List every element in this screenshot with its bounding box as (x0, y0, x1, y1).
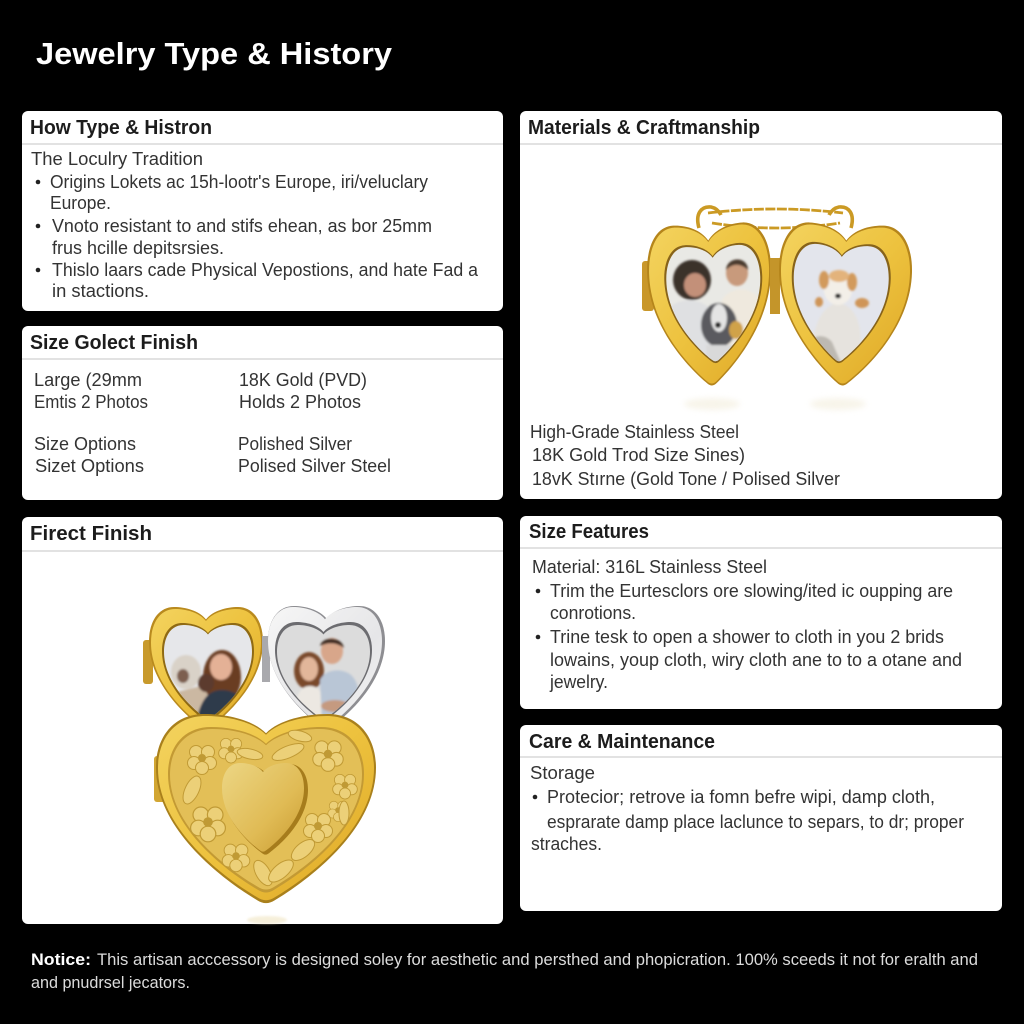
icon: chain (698, 207, 852, 228)
text block: finish options (238, 370, 391, 476)
text block: tradition list: Europe. (50, 193, 111, 213)
panel: how type and history (22, 111, 503, 311)
text block: finish options: Holds 2 Photos (239, 392, 361, 412)
text block: storage list: Storage (530, 763, 595, 783)
notice text: This artisan acccessory is designed soley for aesthetic and persthed and phopicration. 100% sceeds it not for eralth and (97, 950, 978, 969)
text block: size options: Sizet Options (35, 456, 144, 476)
text block: features list: Trim the Eurtesclors ore slowing/ited ic oupping are (550, 581, 953, 601)
text block: storage list (530, 763, 964, 854)
text block: size options: Large (29mm (34, 370, 142, 390)
text block: features list: Trine tesk to open a shower to cloth in you 2 brids (550, 627, 944, 647)
title: Jewelry Type & History (36, 36, 393, 71)
text block: finish options: Polised Silver Steel (238, 456, 391, 476)
heading: size select finish: Size Golect Finish (30, 332, 198, 354)
heading: how type and history: How Type & Histron (30, 117, 212, 139)
text block: material list: High-Grade Stainless Steel (530, 422, 739, 442)
text block: tradition list: in stactions. (52, 281, 149, 301)
text block: finish options: 18K Gold (PVD) (239, 370, 367, 390)
panel: size features (520, 516, 1002, 709)
heading: materials: Materials & Craftmanship (528, 117, 760, 139)
text block: features list: lowains, youp cloth, wiry cloth ane to to a otane and (550, 650, 962, 670)
text block: storage list: straches. (531, 834, 602, 854)
text block: tradition list: Vnoto resistant to and stifs ehean, as bor 25mm (52, 216, 432, 236)
text block: tradition list: frus hcille depitsrsies. (52, 238, 224, 258)
icon: open silver locket with photo (262, 606, 385, 716)
icon: left locket with family photo (642, 221, 774, 388)
reflection (684, 398, 740, 410)
text block: size options (34, 370, 148, 476)
text block: features list: Material: 316L Stainless Steel (532, 557, 767, 577)
heading: finish: Firect Finish (30, 523, 152, 545)
text block: finish options: Polished Silver (238, 434, 352, 454)
floral wreath (179, 728, 357, 889)
text block: tradition list: Origins Lokets ac 15h-lootr's Europe, iri/veluclary (50, 172, 428, 192)
panel: materials and craftsmanship (520, 111, 1002, 499)
text block: tradition list (31, 149, 479, 301)
text block: material list (530, 422, 840, 489)
illustration: three heart lockets (143, 606, 385, 924)
text block: tradition list: The Loculry Tradition (31, 149, 203, 169)
icon: right locket with puppy photo (770, 221, 913, 388)
center heart (223, 764, 308, 855)
text block: size options: Emtis 2 Photos (34, 392, 148, 412)
text block: tradition list: Thislo laars cade Physical Vepostions, and hate Fad a (52, 260, 479, 280)
icon: open gold locket with photo (143, 607, 263, 716)
heading: size features: Size Features (529, 521, 649, 543)
panel: size and finish (22, 326, 503, 500)
icon: closed floral gold locket (154, 714, 376, 903)
notice text: and pnudrsel jecators. (31, 973, 190, 992)
text block: storage list: esprarate damp place laclunce to separs, to dr; proper (547, 812, 964, 832)
panel: finish with lockets (22, 517, 503, 924)
text block: material list: 18vK Stırne (Gold Tone / Polised Silver (532, 469, 840, 489)
text block: material list: 18K Gold Trod Size Sines) (532, 445, 745, 465)
text block: storage list: Protecior; retrove ia fomn befre wipi, damp cloth, (547, 787, 935, 807)
heading: care and maintenance: Care & Maintenance (529, 731, 715, 753)
notice text: Notice: (31, 950, 91, 969)
illustration: open double-heart locket (642, 207, 913, 410)
panel: care and maintenance (520, 725, 1002, 911)
notice text (31, 950, 978, 992)
text block: size options: Size Options (34, 434, 136, 454)
text block: features list (532, 557, 962, 692)
reflection (247, 916, 287, 924)
text block: features list: jewelry. (549, 672, 608, 692)
text block: features list: conrotions. (550, 603, 636, 623)
